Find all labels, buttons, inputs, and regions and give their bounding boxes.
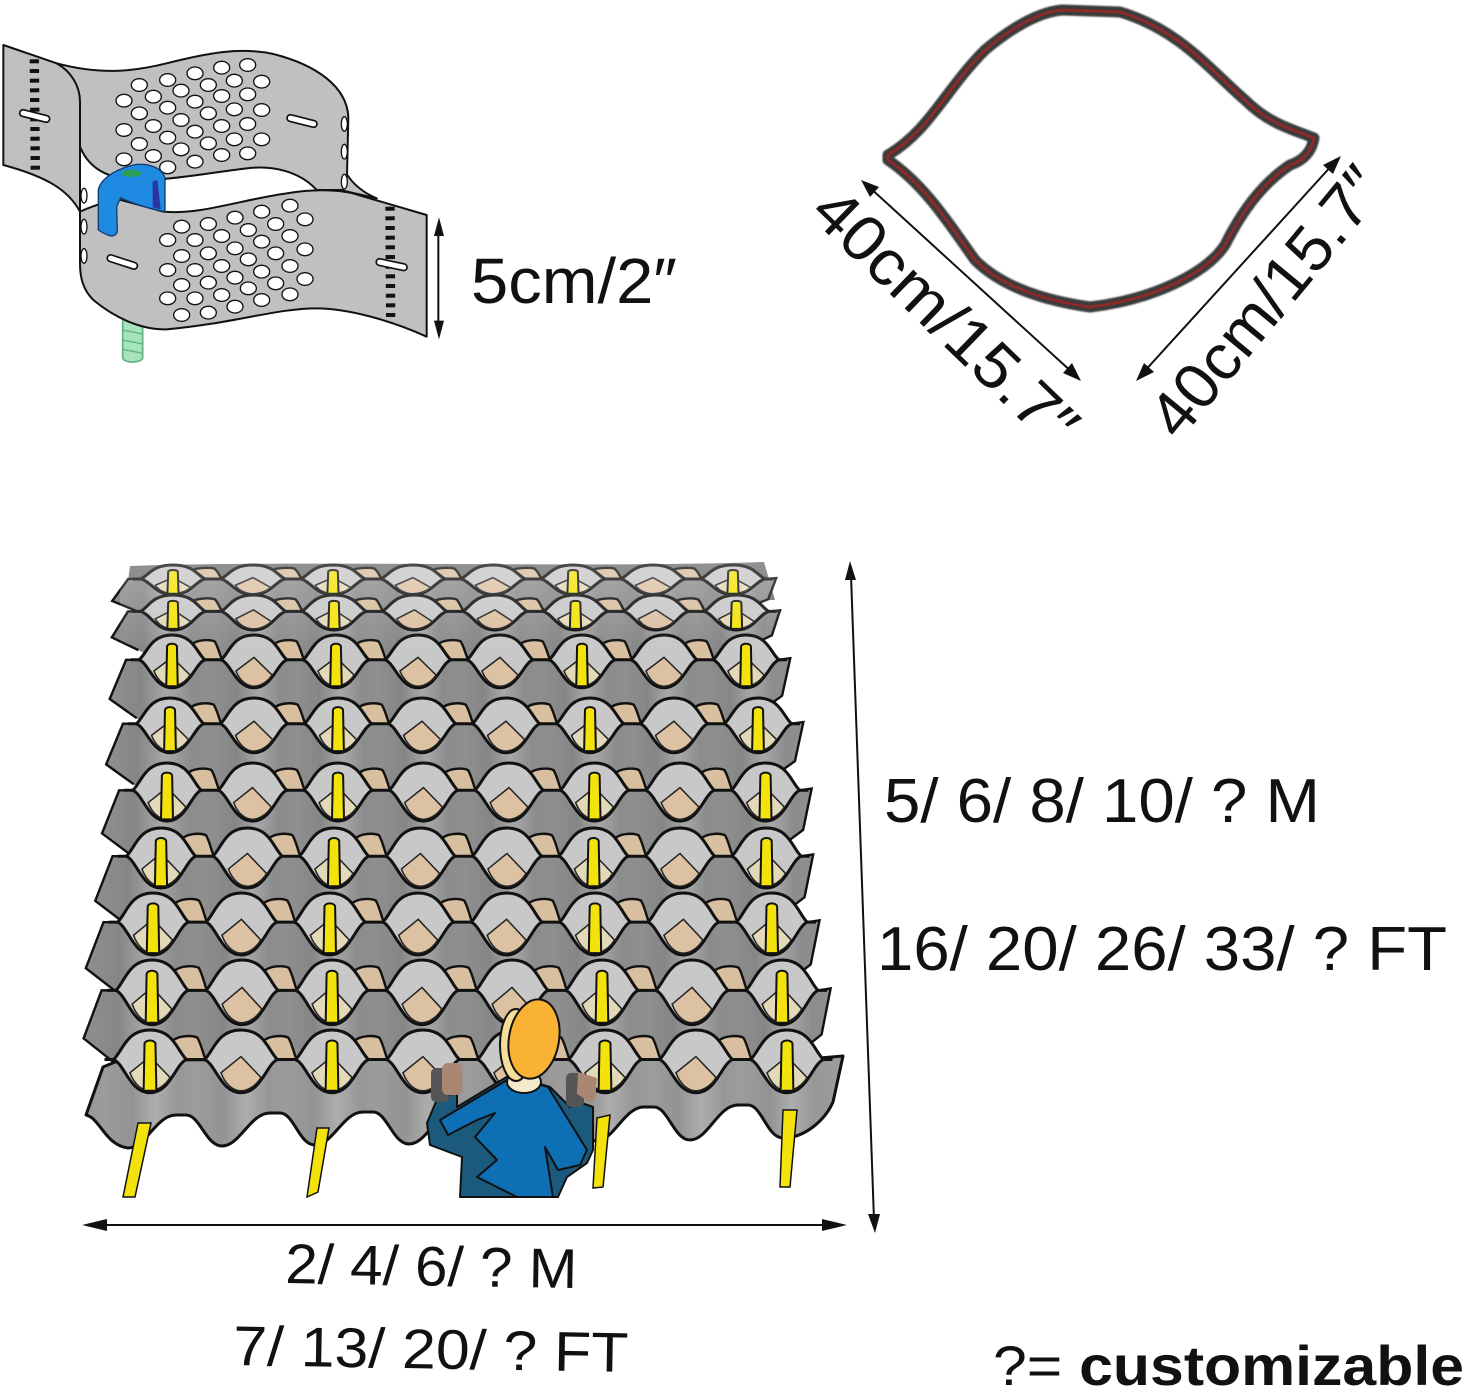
length labels: 5/ 6/ 8/ 10/ ? M	[884, 767, 1320, 836]
illustration: geocell grid laid on a slope with worker	[84, 560, 843, 1197]
dimension arrow: length	[845, 561, 880, 1233]
illustration: expanded cell outline	[888, 10, 1314, 307]
dimension label: cell left side: 40cm/15.7″	[798, 173, 1093, 461]
dimension arrow: cell left side	[861, 180, 1081, 381]
width labels: 2/ 4/ 6/ ? M	[285, 1232, 578, 1300]
front panel	[80, 190, 427, 337]
worker	[427, 995, 597, 1197]
height arrow	[434, 217, 444, 339]
blue connector clip	[98, 164, 165, 236]
width labels	[233, 1232, 629, 1384]
left flap	[3, 45, 80, 212]
dimension arrow: cell right side	[1136, 156, 1341, 381]
right flap	[343, 175, 377, 198]
dimension label: cell right side: 40cm/15.7″	[1134, 152, 1398, 451]
grid rows	[84, 565, 843, 1148]
haze on far rows	[120, 560, 780, 650]
top rim of grid	[125, 562, 775, 606]
front holes	[81, 188, 313, 321]
height label: 5cm/2″	[471, 245, 677, 317]
rebar anchor	[123, 317, 143, 362]
dimension arrow: width	[82, 1219, 847, 1231]
back holes	[116, 59, 347, 189]
yellow ground stakes	[123, 1110, 797, 1197]
slots on front panel	[106, 254, 408, 271]
back panel	[57, 51, 348, 190]
illustration: single geocell strip with connector and anchor	[3, 45, 444, 362]
length labels	[877, 767, 1447, 984]
slots on back panel	[19, 109, 318, 128]
perforation ladder left	[20, 59, 49, 174]
width labels: 7/ 13/ 20/ ? FT	[233, 1314, 629, 1384]
length labels: 16/ 20/ 26/ 33/ ? FT	[877, 915, 1447, 984]
perforation ladder right	[376, 207, 405, 321]
